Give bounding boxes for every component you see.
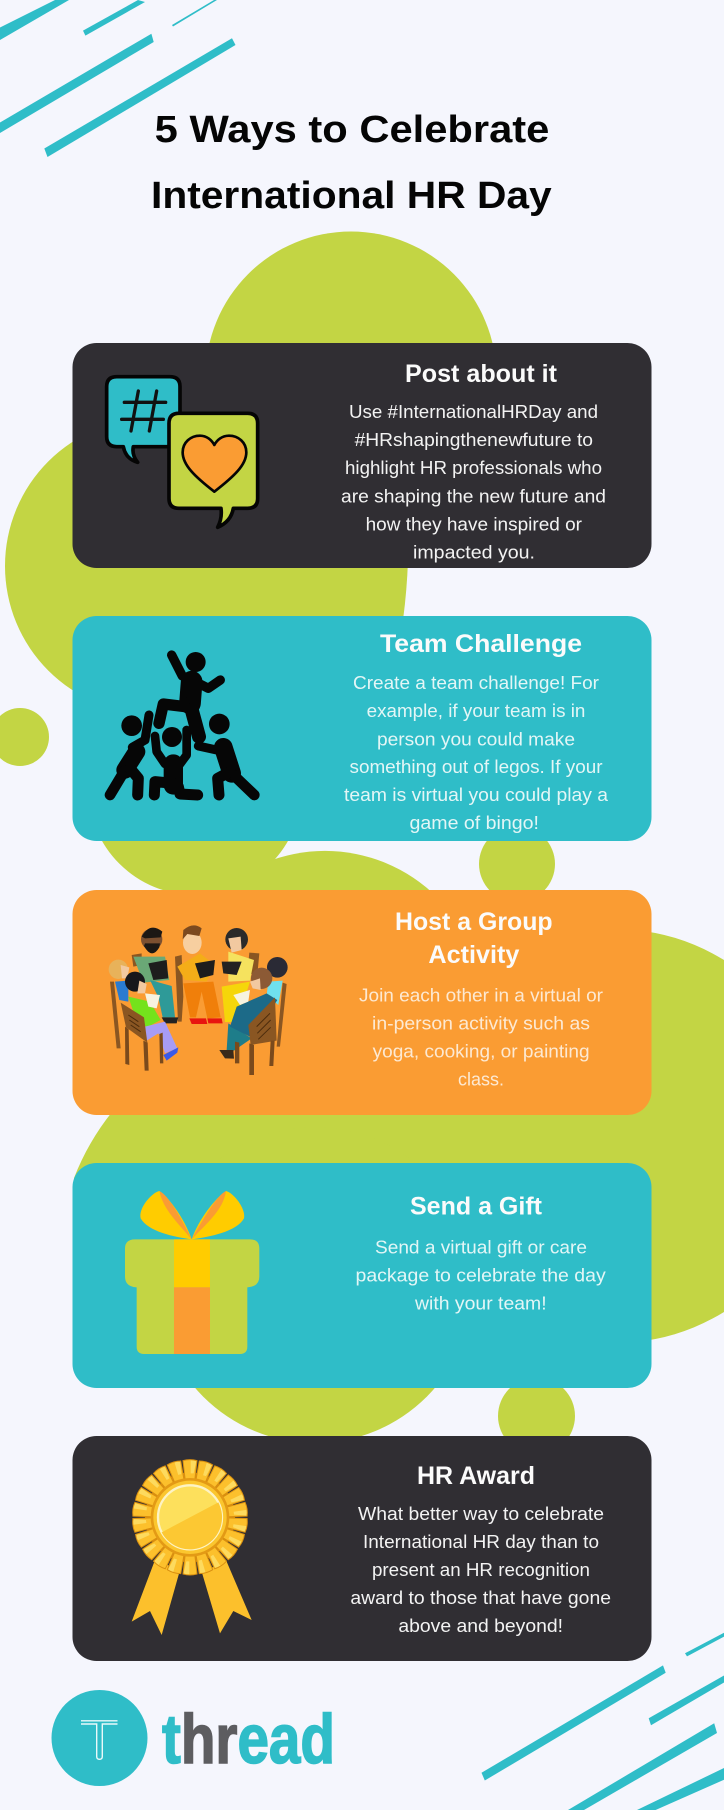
- icon: logo badge with T: [52, 1690, 148, 1786]
- heading: host a group activity: Activity: [428, 941, 519, 969]
- text block: host a group activity: [359, 984, 603, 1090]
- heading: post about it: Post about it: [405, 360, 558, 388]
- text block: team challenge: Create a team challenge! For: [353, 672, 599, 693]
- text block: hr award: International HR day than to: [363, 1531, 599, 1552]
- text block: post about it: [341, 401, 606, 562]
- text block: post about it: impacted you.: [413, 542, 535, 562]
- logo wordmark: thread: [162, 1700, 335, 1778]
- decorative green background circles: [0, 232, 724, 1454]
- icon: team building human pyramid: [110, 652, 254, 795]
- text block: post about it: Use #InternationalHRDay and: [349, 401, 598, 422]
- text block: hr award: present an HR recognition: [372, 1559, 590, 1580]
- text block: send a gift: package to celebrate the day: [356, 1265, 606, 1286]
- text block: hr award: What better way to celebrate: [358, 1503, 604, 1524]
- text block: post about it: are shaping the new future and: [341, 486, 606, 506]
- text block: post about it: how they have inspired or: [366, 514, 582, 534]
- text block: post about it: #HRshapingthenewfuture to: [355, 429, 593, 450]
- heading: send a gift: Send a Gift: [410, 1192, 543, 1220]
- text block: send a gift: [356, 1237, 606, 1314]
- text block: team challenge: example, if your team is in: [367, 700, 585, 721]
- heading: hr award: HR Award: [417, 1462, 535, 1490]
- title: 5 Ways to Celebrate: [155, 109, 549, 151]
- text block: team challenge: game of bingo!: [410, 812, 539, 833]
- text block: host a group activity: Join each other in a virtual or: [359, 984, 603, 1006]
- text block: team challenge: team is virtual you could play a: [344, 784, 609, 805]
- heading: host a group activity: Host a Group: [395, 908, 553, 936]
- text block: hr award: above and beyond!: [398, 1615, 563, 1636]
- panel: team challenge: [72, 616, 652, 841]
- logo: thread: [52, 1690, 335, 1786]
- text block: send a gift: with your team!: [414, 1293, 547, 1314]
- text block: send a gift: Send a virtual gift or care: [375, 1237, 587, 1258]
- diagonal lines: bottom right: [482, 1633, 724, 1810]
- panel: hr award: [72, 1436, 652, 1661]
- panel: post about it: [72, 343, 652, 568]
- text block: team challenge: person you could make: [377, 728, 575, 749]
- icon: people reading in a circle: [109, 925, 288, 1075]
- title: [151, 109, 552, 217]
- diagonal lines: top left: [0, 0, 236, 157]
- text block: team challenge: [344, 672, 609, 833]
- icon: award rosette: [132, 1460, 252, 1635]
- text block: host a group activity: class.: [458, 1069, 504, 1090]
- text block: hr award: award to those that have gone: [350, 1587, 611, 1608]
- icon: gift box: [125, 1191, 259, 1354]
- heading: team challenge: Team Challenge: [380, 630, 582, 658]
- icon: speech bubbles with hashtag and heart: [107, 377, 258, 527]
- text block: host a group activity: in-person activity such as: [372, 1012, 590, 1033]
- text block: post about it: highlight HR professionals who: [345, 457, 602, 478]
- text block: team challenge: something out of legos. If your: [350, 756, 602, 777]
- text block: hr award: [350, 1503, 611, 1636]
- text block: host a group activity: yoga, cooking, or painting: [373, 1041, 590, 1062]
- panel: host a group activity: [72, 890, 652, 1115]
- heading: host a group activity: [395, 908, 553, 969]
- title: International HR Day: [151, 175, 552, 217]
- panel: send a gift: [72, 1163, 652, 1388]
